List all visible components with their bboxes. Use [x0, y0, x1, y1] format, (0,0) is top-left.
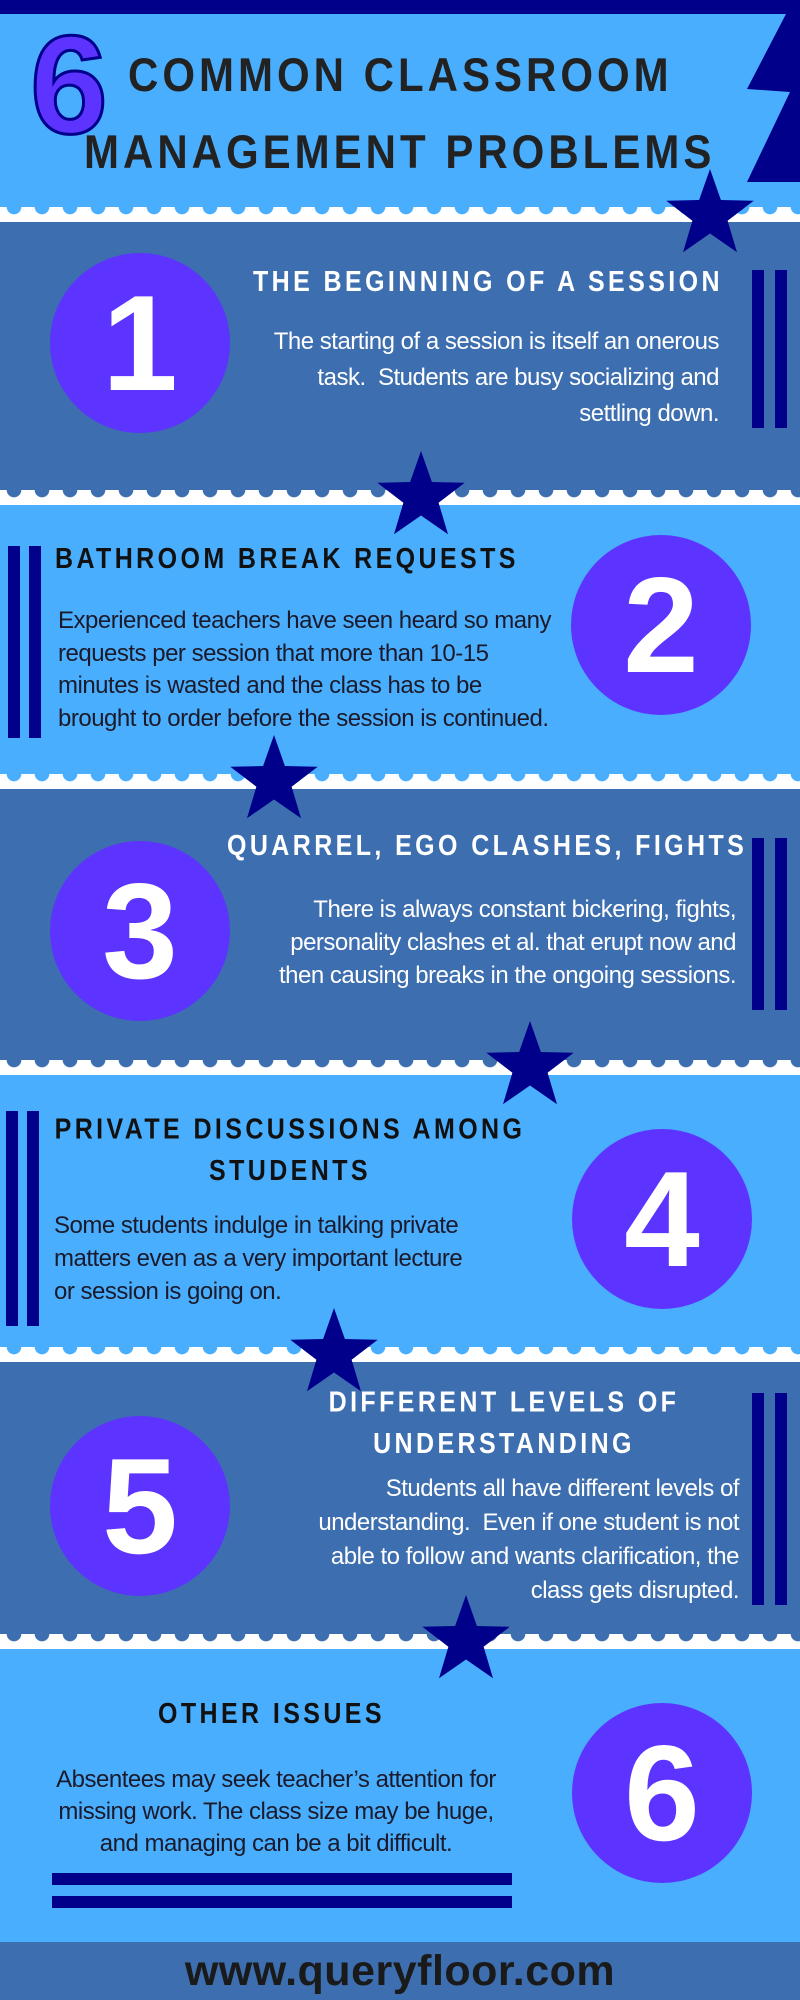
number 5	[50, 1416, 230, 1596]
heading 1: THE BEGINNING OF A SESSION	[253, 266, 723, 298]
number 3	[50, 841, 230, 1021]
corner triangles	[747, 14, 800, 182]
number 6: 6	[624, 1717, 700, 1869]
text 2: Experienced teachers have seen heard so many	[58, 607, 551, 634]
text 1	[274, 328, 719, 427]
divider 1	[0, 207, 800, 222]
number 1	[50, 253, 230, 433]
star 6	[422, 1595, 510, 1678]
website url: www.queryfloor.com	[185, 1947, 615, 1995]
number 2: 2	[623, 549, 699, 701]
title: COMMON CLASSROOM	[128, 48, 673, 101]
number 4	[572, 1129, 752, 1309]
text 2	[58, 607, 552, 732]
text 2: requests per session that more than 10-15	[58, 640, 488, 666]
text 5: Students all have different levels of	[386, 1475, 739, 1502]
text 1: settling down.	[579, 400, 719, 427]
text 4: matters even as a very important lecture	[54, 1245, 462, 1272]
bars 2	[8, 546, 41, 738]
star 1	[666, 169, 754, 252]
text 3: then causing breaks in the ongoing sessions.	[279, 962, 736, 989]
heading 3: QUARREL, EGO CLASHES, FIGHTS	[227, 830, 747, 862]
bars 4	[6, 1111, 39, 1326]
heading 4: PRIVATE DISCUSSIONS AMONG	[55, 1113, 525, 1145]
title	[84, 48, 715, 178]
number 1: 1	[102, 267, 178, 419]
heading 4	[55, 1113, 525, 1187]
bars 5	[752, 1393, 787, 1605]
panel 2	[0, 505, 800, 774]
panel 1	[0, 222, 800, 490]
star 2	[378, 451, 464, 534]
panel 4	[0, 1075, 800, 1347]
text 5: able to follow and wants clarification, the	[331, 1543, 739, 1570]
text 1: task. Students are busy socializing and	[317, 364, 719, 391]
panel 5	[0, 1362, 800, 1634]
footer	[0, 1942, 800, 2000]
text 5: understanding. Even if one student is not	[318, 1509, 739, 1536]
heading 5	[329, 1386, 679, 1460]
double underline bars	[52, 1873, 512, 1908]
bars 1	[752, 270, 787, 428]
text 6: and managing can be a bit difficult.	[100, 1830, 452, 1857]
text 2: brought to order before the session is continued.	[58, 704, 548, 732]
text 3: personality clashes et al. that erupt now and	[290, 929, 736, 956]
text 5: class gets disrupted.	[531, 1577, 739, 1604]
text 3: There is always constant bickering, fights,	[313, 896, 736, 923]
number 6	[572, 1703, 752, 1883]
star 3	[230, 735, 318, 818]
panel 6	[0, 1649, 800, 1942]
top dark strip	[0, 0, 800, 14]
bars 3	[752, 838, 787, 1010]
text 5	[318, 1475, 740, 1604]
number 3: 3	[102, 855, 178, 1007]
text 1: The starting of a session is itself an onerous	[274, 328, 719, 355]
panel 3	[0, 789, 800, 1060]
text 4: or session is going on.	[54, 1278, 281, 1305]
text 6: Absentees may seek teacher’s attention for	[56, 1766, 496, 1793]
number 4: 4	[624, 1143, 700, 1295]
text 4	[54, 1212, 462, 1305]
heading 5: UNDERSTANDING	[373, 1428, 635, 1460]
star 4	[486, 1021, 574, 1104]
header panel	[0, 14, 800, 207]
text 6	[56, 1766, 496, 1857]
number 5: 5	[102, 1430, 178, 1582]
heading 6: OTHER ISSUES	[158, 1698, 385, 1730]
title: MANAGEMENT PROBLEMS	[84, 125, 715, 178]
text 3	[279, 896, 736, 989]
text 4: Some students indulge in talking private	[54, 1212, 458, 1239]
text 6: missing work. The class size may be huge,	[58, 1798, 494, 1825]
number 2	[571, 535, 751, 715]
decorative big six: 6	[30, 6, 108, 163]
heading 4: STUDENTS	[209, 1155, 371, 1187]
heading 5: DIFFERENT LEVELS OF	[329, 1386, 679, 1418]
text 2: minutes is wasted and the class has to be	[58, 672, 482, 699]
heading 2: BATHROOM BREAK REQUESTS	[55, 543, 519, 575]
star 5	[290, 1308, 378, 1392]
